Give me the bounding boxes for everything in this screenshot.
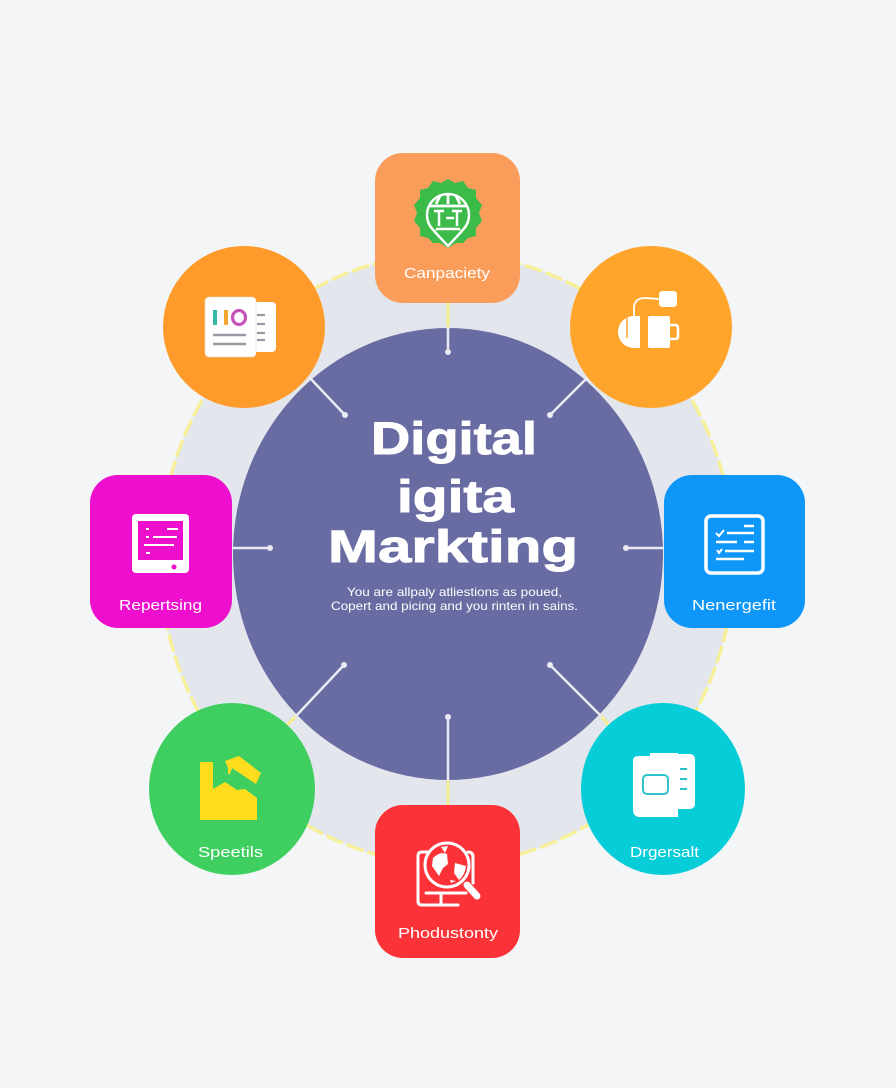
panel: left magenta square	[90, 475, 232, 628]
panel: bottom-left green circle	[149, 703, 315, 875]
label: Speetils	[198, 844, 263, 861]
label: Repertsing	[119, 597, 202, 614]
subtitle text: Copert and picing and you rinten in sains.	[331, 599, 578, 613]
icon: green badge with globe pin	[414, 179, 482, 248]
subtitle text	[331, 585, 578, 613]
panel: top-left orange circle	[163, 246, 325, 408]
label: Nenergefit	[692, 597, 777, 614]
panel: bottom-right teal circle	[581, 703, 745, 875]
title: igita	[397, 471, 515, 522]
icon: folder document	[633, 753, 695, 817]
subtitle text: You are allpaly atliestions as poued,	[347, 585, 562, 599]
icon: checklist	[706, 516, 763, 573]
outer ring with dashed yellow edge	[160, 254, 734, 864]
panel: top orange square	[375, 153, 520, 303]
icon: yellow chart and tag	[200, 756, 261, 820]
icon: mouse and mug	[618, 291, 678, 348]
icon: monitor and magnifying globe	[418, 843, 477, 905]
panel: bottom red square	[375, 805, 520, 958]
central circle	[233, 328, 663, 780]
panel: top-right orange circle	[570, 246, 732, 408]
title: Markting	[328, 521, 578, 572]
icon: documents	[205, 297, 276, 357]
connector lines	[232, 303, 664, 805]
label: Drgersalt	[630, 844, 700, 861]
panel: right blue square	[664, 475, 805, 628]
icon: tablet report	[132, 514, 189, 573]
title	[328, 413, 578, 572]
label: Phodustonty	[398, 925, 499, 942]
label: Canpaciety	[404, 265, 491, 282]
title: Digital	[371, 413, 537, 464]
